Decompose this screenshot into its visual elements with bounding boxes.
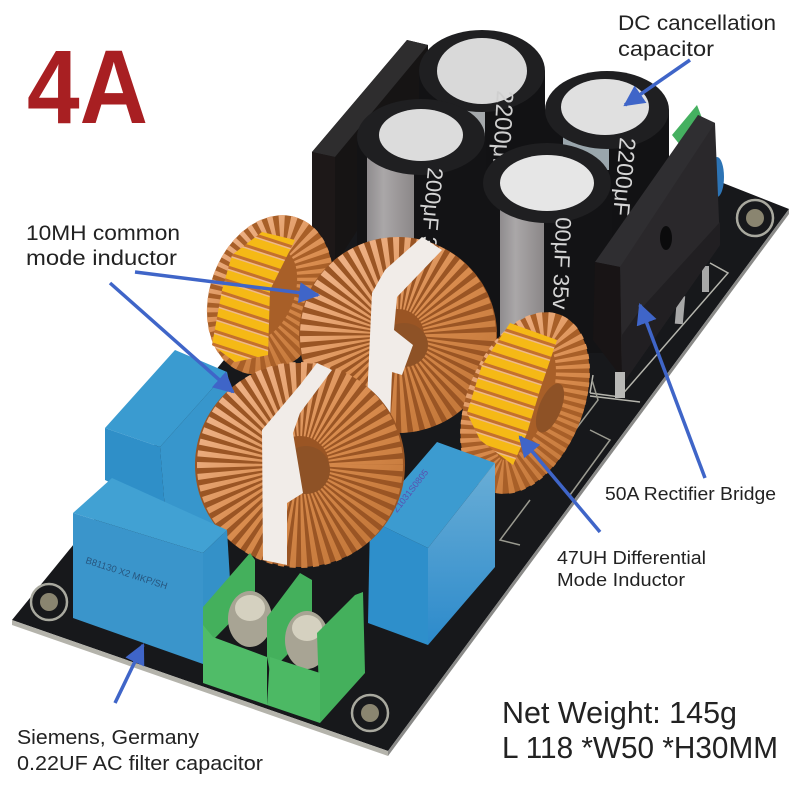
label: weight and dimensions: Net Weight: 145g <box>502 695 737 730</box>
green screw terminal <box>203 553 365 723</box>
circuit board <box>12 150 789 756</box>
label: Siemens capacitor <box>17 727 263 775</box>
label: DC cancellation capacitor: DC cancellation <box>618 12 776 35</box>
green and blue parts behind the bridge <box>672 105 724 197</box>
heading: 4A: 4A <box>27 29 148 146</box>
capacitor rear right: 2200μF <box>608 137 641 217</box>
capacitor front left: 200μF 35v <box>414 167 448 273</box>
arrow: to front common mode inductor <box>110 283 233 392</box>
capacitor front left <box>357 99 486 287</box>
capacitor front right <box>483 143 612 353</box>
label: 47UH Differential Mode Inductor: 47UH Differential <box>557 548 706 568</box>
capacitor front right: 00μF 35v 220 <box>546 217 576 353</box>
label: 10MH common mode inductor: 10MH common <box>26 222 180 245</box>
rectifier bridge: front block <box>593 115 720 398</box>
10MH inductor rear with yellow core <box>186 197 354 393</box>
arrow: to rectifier bridge <box>640 305 705 478</box>
label: 10MH common mode inductor <box>26 222 180 270</box>
label: Siemens capacitor: Siemens, Germany <box>17 727 199 749</box>
label: 47UH Differential Mode Inductor: Mode Inductor <box>557 570 685 590</box>
label: 10MH common mode inductor: mode inductor <box>26 247 177 270</box>
arrow: to differential inductor <box>520 437 600 532</box>
electrolytic capacitors <box>357 30 669 353</box>
Siemens capacitor rear left <box>105 350 240 535</box>
label: Siemens capacitor: 0.22UF AC filter capacitor <box>17 753 263 775</box>
label: weight and dimensions <box>502 695 778 765</box>
10MH common mode inductor front <box>195 363 405 567</box>
Siemens capacitor front left <box>73 478 230 664</box>
capacitor rear left: 2200μF 3 <box>486 90 518 193</box>
capacitor rear left <box>419 30 545 201</box>
label: DC cancellation capacitor <box>618 12 776 61</box>
10MH common mode inductor upper <box>299 237 497 433</box>
47UH differential mode inductor <box>436 293 614 513</box>
label: 47UH Differential Mode Inductor <box>557 548 706 590</box>
label: weight and dimensions: L 118 *W50 *H30MM <box>502 730 778 765</box>
Siemens capacitor front right <box>368 442 495 645</box>
Siemens capacitor front left: B81130 X2 MKP/SH <box>84 555 169 592</box>
label: 50A Rectifier Bridge: 50A Rectifier Bridge <box>605 484 776 504</box>
capacitor rear right <box>545 71 669 240</box>
rectifier bridge: rear heat block <box>312 40 428 265</box>
arrow: to rear common mode inductor <box>135 272 318 295</box>
label: DC cancellation capacitor: capacitor <box>618 38 714 61</box>
Siemens capacitor front right: Z1031S0805 <box>391 467 430 514</box>
arrow: to Siemens capacitor <box>115 645 143 703</box>
arrow: to DC capacitor <box>625 60 690 105</box>
